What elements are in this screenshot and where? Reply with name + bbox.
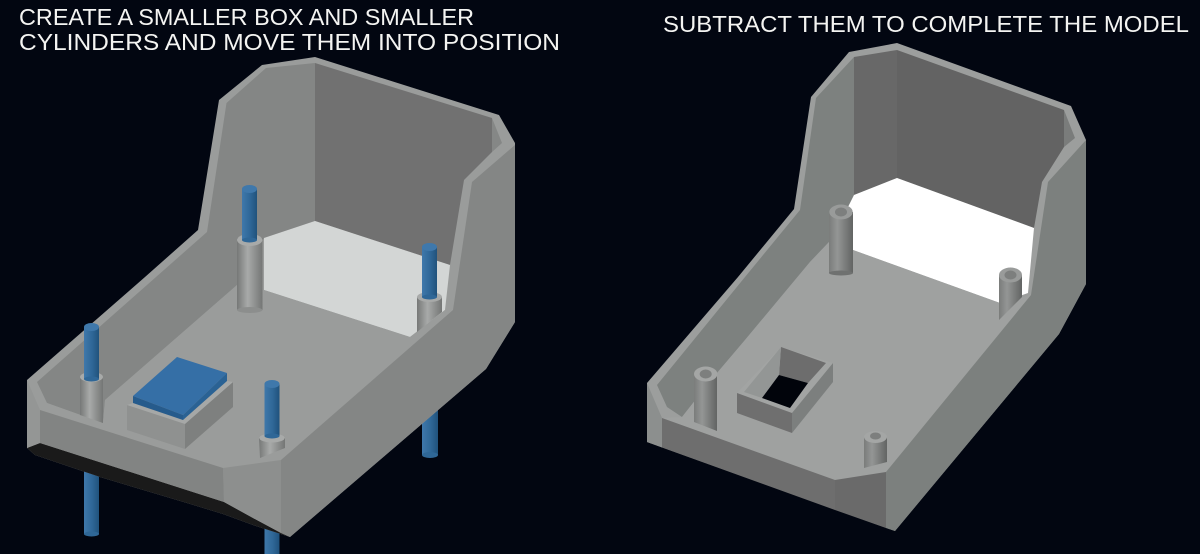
- floor: [662, 242, 1031, 480]
- front right chamfer: [223, 460, 281, 533]
- back wall: [315, 63, 492, 265]
- panel: right completed model: [647, 43, 1086, 531]
- hollow standoff 4: [864, 431, 887, 468]
- grey standoff 3: [80, 372, 103, 423]
- hollow standoff 3: [694, 366, 717, 431]
- back wall: [897, 50, 1064, 228]
- panel: left model with tool shapes: [27, 57, 515, 554]
- blue cylinder 3: [84, 323, 99, 382]
- back left wall: [854, 50, 897, 195]
- left inner wall: [37, 63, 315, 423]
- blue cylinder 4: [264, 380, 280, 438]
- grey standoff 1: [237, 234, 262, 313]
- heading: left step: [19, 4, 560, 55]
- grey standoff 4: [259, 434, 285, 458]
- hollow standoff 1: [829, 204, 853, 276]
- back wall chamfer: [1064, 110, 1075, 147]
- heading: right step: SUBTRACT THEM TO COMPLETE THE MODEL: [663, 11, 1189, 37]
- hollow standoff 2: [999, 268, 1022, 320]
- grey box: [127, 381, 233, 449]
- rectangular pocket: [737, 347, 833, 433]
- left side wall: [657, 57, 854, 417]
- blue cylinder 2: [422, 243, 437, 300]
- outer right wall: [886, 140, 1086, 531]
- outer right wall: [281, 145, 515, 537]
- blue cylinder 1: [242, 185, 257, 242]
- front face: [662, 418, 835, 510]
- front face: [40, 410, 224, 502]
- heading: left step: CREATE A SMALLER BOX AND SMALLER: [19, 4, 474, 30]
- grey standoff 2: [417, 292, 442, 332]
- blue box: [133, 357, 227, 420]
- underside shadow: [27, 443, 290, 537]
- floor opening: [848, 178, 1034, 303]
- front right chamfer: [835, 472, 886, 528]
- shell silhouette and rim: [27, 57, 515, 537]
- left chamfer: [27, 380, 40, 448]
- floor opening: [264, 221, 450, 337]
- back wall chamfer: [492, 118, 502, 152]
- heading: left step: CYLINDERS AND MOVE THEM INTO POSITION: [19, 29, 560, 55]
- blue cylinders below the shell: [84, 405, 438, 554]
- shell silhouette and rim: [647, 43, 1086, 531]
- left chamfer: [647, 383, 662, 448]
- floor: [40, 285, 453, 468]
